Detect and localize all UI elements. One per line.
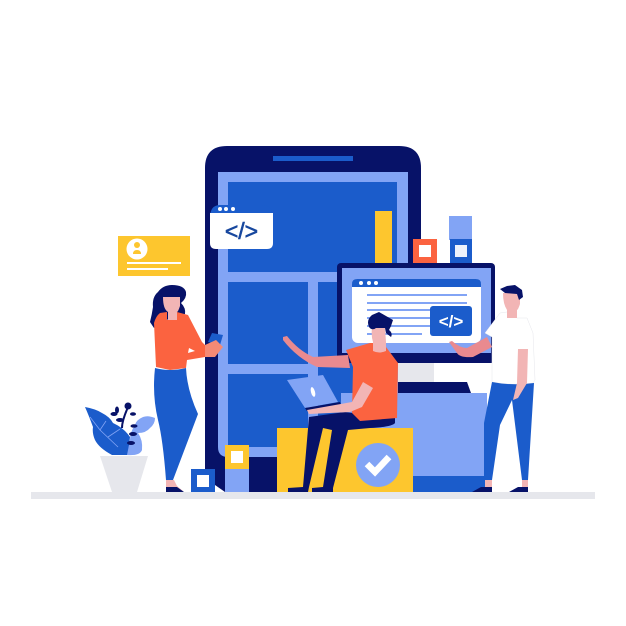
profile card [118,236,190,276]
seated man [283,312,398,492]
code window card: </> [225,218,258,244]
plant [85,402,155,492]
blue block stack [449,216,472,263]
small blue block [191,469,215,492]
desk [341,393,487,492]
monitor [337,263,495,393]
yellow block with check [277,428,413,492]
monitor: </> [439,312,463,331]
ground line [31,492,595,499]
small stack left [225,445,249,492]
yellow bar [375,211,392,263]
woman [150,285,223,492]
code window card [210,205,273,249]
phone [205,146,421,492]
standing man [449,285,535,492]
orange square block [413,239,437,263]
